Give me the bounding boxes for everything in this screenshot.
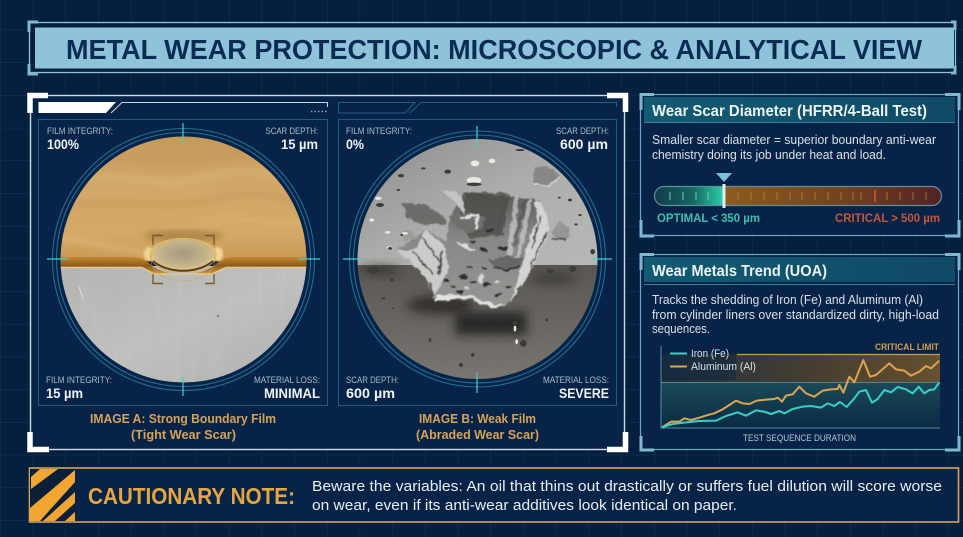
lower left readout A	[46, 375, 112, 401]
panel: wear metals trend	[640, 254, 959, 450]
caption B: (Abraded Wear Scar)	[416, 428, 539, 442]
scar depth readout A: 15 µm	[281, 137, 318, 152]
marker	[716, 173, 732, 182]
icon: hazard stripes	[30, 469, 75, 521]
caution body	[312, 478, 942, 514]
x axis label: TEST SEQUENCE DURATION	[743, 433, 856, 444]
caption A: IMAGE A: Strong Boundary Film	[90, 412, 276, 426]
aluminum series	[662, 360, 939, 427]
material loss readout A: MINIMAL	[264, 386, 320, 401]
legend: Iron (Fe)	[691, 348, 729, 360]
film integrity readout B: 0%	[346, 137, 364, 152]
title text: METAL WEAR PROTECTION: MICROSCOPIC & ANALYTICAL VIEW	[66, 34, 923, 65]
lower left readout A: 15 µm	[46, 386, 83, 401]
lower left readout B: 600 µm	[346, 386, 395, 401]
caution body: on wear, even if its anti-wear additives look identical on paper.	[312, 497, 737, 514]
rings A	[52, 128, 314, 390]
description: chemistry doing its job under heat and load.	[652, 148, 886, 162]
material loss readout A	[254, 375, 320, 401]
description: from cylinder liners over standardized dirty, high-load	[652, 308, 939, 322]
scar depth readout B: SCAR DEPTH:	[556, 126, 609, 137]
lower left readout B: SCAR DEPTH:	[346, 375, 399, 386]
material loss readout B: SEVERE	[559, 386, 609, 401]
lower left readout B	[346, 375, 399, 401]
panel B tab	[338, 102, 616, 113]
material loss readout B: MATERIAL LOSS:	[543, 375, 609, 386]
material loss readout B	[543, 375, 609, 401]
caution heading: CAUTIONARY NOTE:	[88, 483, 295, 509]
heading	[644, 257, 955, 284]
panel: image A	[38, 102, 328, 442]
flakes	[402, 203, 447, 224]
caption B	[416, 412, 539, 442]
legend	[670, 348, 756, 373]
film integrity readout A: 100%	[47, 137, 79, 152]
line chart	[661, 342, 940, 444]
gauge bar	[654, 173, 942, 208]
caution body: Beware the variables: An oil that thins out drastically or suffers fuel dilution will score worse	[312, 478, 942, 495]
cautionary note bar	[30, 468, 958, 522]
caption A: (Tight Wear Scar)	[131, 428, 236, 442]
film integrity readout B: FILM INTEGRITY:	[346, 126, 412, 137]
crater bottom rim	[435, 295, 507, 308]
panel: wear scar diameter	[640, 94, 959, 236]
critical limit label: CRITICAL LIMIT	[875, 342, 939, 353]
title banner	[29, 22, 956, 74]
upper crater shadow	[457, 192, 510, 238]
gauge labels: OPTIMAL < 350 µm	[657, 211, 760, 225]
microscopy comparison frame	[30, 96, 626, 450]
legend: Aluminum (Al)	[691, 361, 756, 373]
panel: image B	[338, 102, 616, 442]
crosshair A	[47, 123, 320, 396]
scar depth readout B: 600 µm	[560, 137, 608, 152]
crater floor	[397, 192, 550, 308]
scar depth readout A	[266, 126, 318, 152]
iron series	[662, 382, 939, 427]
wear scar lens	[150, 238, 216, 272]
description: Tracks the shedding of Iron (Fe) and Aluminum (Al)	[652, 293, 923, 307]
lower left readout A: FILM INTEGRITY:	[46, 375, 112, 386]
crosshair B	[343, 126, 612, 393]
description	[652, 133, 936, 162]
micrograph A	[60, 136, 308, 384]
target brackets	[153, 236, 214, 284]
caption A	[90, 412, 276, 442]
panel: wear scar diameter: CRITICAL > 500 µm	[835, 211, 940, 225]
heading: Wear Scar Diameter (HFRR/4-Ball Test)	[652, 103, 927, 120]
left jagged wall	[397, 230, 450, 298]
film integrity readout A: FILM INTEGRITY:	[47, 126, 113, 137]
crater debris	[444, 228, 512, 297]
film integrity readout B	[346, 126, 412, 152]
panel A tab	[38, 102, 328, 113]
smudges	[407, 296, 473, 314]
material loss readout A: MATERIAL LOSS:	[254, 375, 320, 386]
caption B: IMAGE B: Weak Film	[419, 412, 536, 426]
heading	[644, 97, 955, 122]
micrograph B	[356, 138, 600, 382]
scar depth readout B	[556, 126, 609, 152]
right jagged wall	[510, 200, 550, 303]
film integrity readout A	[47, 126, 113, 152]
scar depth readout A: SCAR DEPTH:	[266, 126, 318, 137]
description	[652, 293, 939, 336]
rings B	[350, 131, 606, 387]
description: sequences.	[652, 322, 710, 336]
surface debris	[367, 149, 595, 367]
streak walls	[497, 198, 530, 255]
description: Smaller scar diameter = superior boundary anti-wear	[652, 133, 936, 147]
heading: Wear Metals Trend (UOA)	[652, 263, 827, 280]
